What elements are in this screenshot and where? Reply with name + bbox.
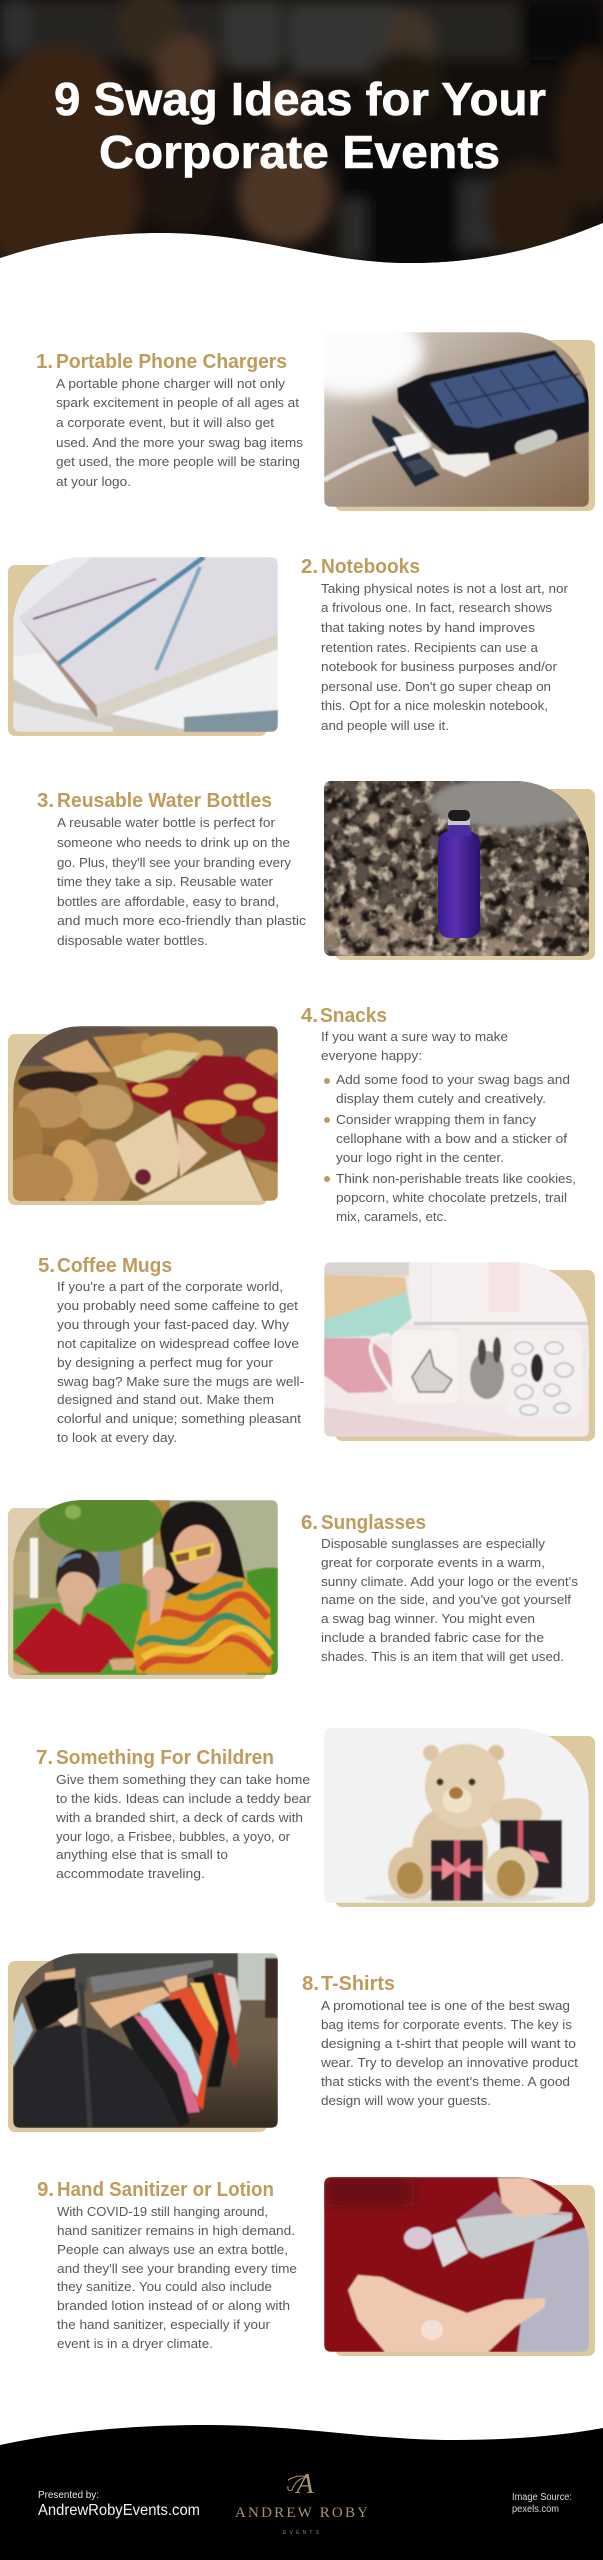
text block 9 (57, 2204, 297, 2351)
text block 1: get used, the more people will be staring (56, 454, 300, 469)
heading 6: 6. (301, 1511, 318, 1534)
text block 4 intro: everyone happy: (321, 1048, 422, 1063)
logo: Andrew Roby Events (235, 2469, 368, 2536)
image backing 8 (8, 1961, 267, 2132)
text block 9: People can always use an extra bottle, (57, 2242, 288, 2257)
image backing 9 (335, 2185, 595, 2356)
text block 2: Taking physical notes is not a lost art, nor (321, 581, 569, 596)
bullet list: Add some food to your swag bags and (336, 1072, 570, 1087)
heading 5: Coffee Mugs (57, 1254, 172, 1277)
photo: sunglasses (13, 1488, 278, 1675)
bullet list: popcorn, white chocolate pretzels, trail (336, 1190, 567, 1205)
text block 3: someone who needs to drink up on the (57, 835, 290, 850)
text block 6: Disposable sunglasses are especially (321, 1536, 546, 1551)
text block 1: a corporate event, but it will also get (56, 415, 274, 430)
image backing 4 (8, 1034, 267, 1205)
text block 5: by designing a perfect mug for your (57, 1355, 274, 1370)
text block 8 (320, 1998, 578, 2108)
panel: 1 portable phone chargers (37, 332, 595, 511)
text block 9: branded lotion instead of or along with (57, 2298, 290, 2313)
heading 4: Snacks (320, 1004, 387, 1027)
text block 5: designed and stand out. Make them (57, 1392, 274, 1407)
text block 3: and much more eco-friendly than plastic (57, 913, 307, 928)
text block 2: a frivolous one. In fact, research shows (321, 600, 553, 615)
text block 9: the hand sanitizer, especially if your (57, 2317, 271, 2332)
logo: Andrew Roby Events: EVENTS (283, 2530, 320, 2536)
hero banner photo (0, 0, 603, 263)
text block 4 intro (321, 1029, 508, 1063)
photo: t-shirts (13, 1953, 278, 2128)
photo: teddy bear (324, 1728, 589, 1903)
photo: water bottle (324, 781, 589, 956)
text block 1: spark excitement in people of all ages at (56, 395, 299, 410)
logo: Andrew Roby Events: A (294, 2469, 314, 2500)
presenter credit: Presented by: (38, 2489, 99, 2501)
title (54, 73, 546, 178)
photo: snacks (13, 1026, 278, 1201)
text block 9: they sanitize. You could also include (57, 2279, 272, 2294)
photo: hand sanitizer (324, 2177, 589, 2352)
panel: 8 t-shirts (8, 1953, 578, 2132)
text block 1: used. And the more your swag bag items (56, 435, 304, 450)
text block 7: to the kids. Ideas can include a teddy bear (56, 1791, 312, 1806)
bullet list: display them cutely and creatively. (336, 1091, 546, 1106)
photo: phone charger (324, 332, 589, 507)
text block 2: that taking notes by hand improves (321, 620, 536, 635)
text block 8: design will wow your guests. (321, 2093, 491, 2108)
heading 1: 1. (36, 350, 53, 373)
heading 1: Portable Phone Chargers (56, 350, 287, 373)
text block 7: anything else that is small to (56, 1847, 228, 1862)
text block 2: personal use. Don't go super cheap on (321, 679, 551, 694)
bullet list (324, 1072, 576, 1224)
heading 3: 3. (37, 789, 54, 812)
panel: 3 reusable water bottles (37, 777, 595, 963)
photo: notebooks (13, 557, 278, 732)
bullet list: your logo right in the center. (336, 1150, 504, 1165)
text block 6 (321, 1536, 579, 1664)
text block 1: A portable phone charger will not only (56, 376, 286, 391)
text block 2: and people will use it. (321, 718, 449, 733)
panel: 4 snacks (1, 1004, 576, 1224)
title: Corporate Events (99, 126, 500, 178)
heading 6: Sunglasses (321, 1511, 426, 1534)
text block 3: go. Plus, they'll see your branding every (57, 855, 292, 870)
image source credit: pexels.com (512, 2504, 559, 2515)
text block 8: designing a t-shirt that people will want to (321, 2036, 576, 2051)
logo: Andrew Roby Events: ANDREW ROBY (235, 2505, 368, 2521)
panel: 7 something for children (36, 1728, 595, 1907)
bullet list: mix, caramels, etc. (336, 1209, 447, 1224)
text block 5: you probably need some caffeine to get (57, 1298, 298, 1313)
text block 6: include a branded fabric case for the (321, 1630, 544, 1645)
text block 6: name on the side, and you've got yourself (321, 1592, 571, 1607)
text block 5 (57, 1279, 304, 1445)
text block 9: With COVID-19 still hanging around, (57, 2204, 268, 2219)
text block 4 intro: If you want a sure way to make (321, 1029, 508, 1044)
presenter credit (38, 2489, 200, 2519)
text block 3: bottles are affordable, easy to brand, (57, 894, 279, 909)
text block 9: and they'll see your branding every time (57, 2261, 297, 2276)
heading 4: 4. (301, 1004, 318, 1027)
text block 6: shades. This is an item that will get used. (321, 1649, 564, 1664)
text block 7: with a branded shirt, a deck of cards with (55, 1810, 303, 1825)
heading 7: 7. (36, 1746, 53, 1769)
text block 7 (55, 1772, 312, 1881)
text block 2: notebook for business purposes and/or (321, 659, 558, 674)
text block 5: swag bag? Make sure the mugs are well- (57, 1374, 304, 1389)
heading 8: T-Shirts (321, 1972, 395, 1995)
heading 3: Reusable Water Bottles (57, 789, 272, 812)
panel: 2 notebooks (8, 555, 569, 736)
text block 5: not capitalize on widespread coffee love (57, 1336, 299, 1351)
text block 5: colorful and unique; something pleasant (57, 1411, 301, 1426)
heading 9: 9. (37, 2178, 54, 2201)
text block 8: A promotional tee is one of the best swag (321, 1998, 570, 2013)
heading 8: 8. (302, 1972, 319, 1995)
text block 2: retention rates. Recipients can use a (321, 640, 539, 655)
text block 6: great for corporate events in a warm, (321, 1555, 545, 1570)
text block 7: Give them something they can take home (56, 1772, 310, 1787)
heading 2: 2. (301, 555, 318, 578)
text block 8: that sticks with the event's theme. A good (321, 2074, 570, 2089)
text block 6: sunny climate. Add your logo or the event's (321, 1574, 579, 1589)
text block 5: to look at every day. (57, 1430, 177, 1445)
bullet list: cellophane with a bow and a sticker of (336, 1131, 567, 1146)
heading 9: Hand Sanitizer or Lotion (57, 2178, 274, 2201)
image backing 1 (335, 340, 595, 511)
image backing 6 (8, 1508, 267, 1679)
heading 7: Something For Children (56, 1746, 274, 1769)
image source credit: Image Source: (512, 2492, 572, 2503)
panel: 6 sunglasses (8, 1488, 579, 1679)
image source credit (512, 2492, 572, 2515)
image backing 2 (8, 565, 267, 736)
image backing 5 (335, 1270, 595, 1441)
text block 3: A reusable water bottle is perfect for (57, 815, 276, 830)
title: 9 Swag Ideas for Your (54, 73, 546, 125)
photo: mugs (324, 1262, 590, 1437)
presenter credit: AndrewRobyEvents.com (38, 2502, 200, 2519)
text block 3: disposable water bottles. (57, 933, 208, 948)
text block 1 (56, 376, 304, 489)
text block 5: you through your fast-paced day. Why (57, 1317, 290, 1332)
text block 2 (321, 581, 569, 733)
text block 3: time they take a sip. Reusable water (57, 874, 274, 889)
text block 7: accommodate traveling. (56, 1866, 205, 1881)
footer band (0, 2425, 603, 2560)
panel: 5 coffee mugs (38, 1254, 595, 1445)
text block 5: If you're a part of the corporate world, (57, 1279, 283, 1294)
image backing 3 (335, 789, 595, 960)
text block 3 (57, 815, 307, 948)
panel: 9 hand sanitizer or lotion (37, 2177, 595, 2356)
image backing 7 (335, 1736, 595, 1907)
heading 5: 5. (38, 1254, 55, 1277)
bullet list: Consider wrapping them in fancy (336, 1112, 537, 1127)
text block 8: wear. Try to develop an innovative product (320, 2055, 578, 2070)
text block 1: at your logo. (56, 474, 131, 489)
text block 6: a swag bag winner. You might even (321, 1611, 535, 1626)
heading 2: Notebooks (321, 555, 420, 578)
text block 9: event is in a dryer climate. (57, 2336, 213, 2351)
text block 8: bag items for corporate events. The key is (321, 2017, 573, 2032)
text block 7: your logo, a Frisbee, bubbles, a yoyo, or (56, 1829, 291, 1844)
text block 2: this. Opt for a nice moleskin notebook, (321, 698, 548, 713)
text block 9: hand sanitizer remains in high demand. (57, 2223, 295, 2238)
bullet list: Think non-perishable treats like cookies, (336, 1171, 576, 1186)
